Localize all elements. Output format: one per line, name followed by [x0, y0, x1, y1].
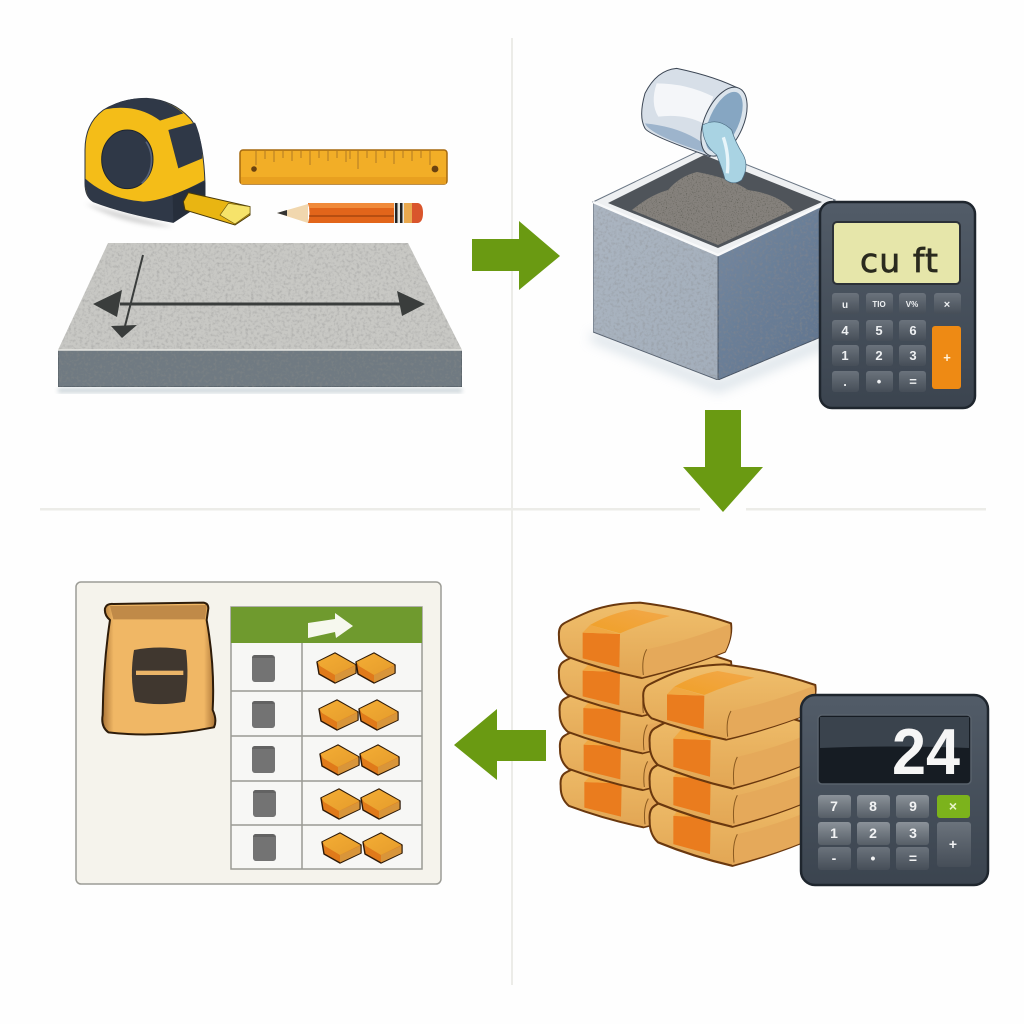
calculator keys: 1 — [841, 348, 849, 363]
icon: concrete box with bucket — [590, 148, 835, 392]
icon: stacked cement bags — [559, 603, 822, 866]
icon: calculator 24 — [801, 695, 988, 885]
calculator keys: - — [832, 850, 837, 866]
calculator keys: × — [949, 798, 957, 814]
icon: cement bag — [102, 603, 215, 734]
calculator keys: 4 — [841, 323, 849, 338]
calculator keys: • — [877, 374, 882, 389]
calculator keys: 1 — [830, 825, 838, 841]
panel: step 2 volume — [590, 68, 975, 408]
table row 2 — [252, 700, 398, 730]
calculator keys: 2 — [869, 825, 877, 841]
calculator keys: = — [909, 850, 917, 866]
icon: bucket pouring water — [642, 68, 757, 183]
icon: tape measure — [85, 98, 250, 227]
icon: ruler — [240, 150, 447, 184]
calculator keys: 7 — [830, 798, 838, 814]
concrete slab — [58, 243, 462, 393]
calculator keys: 2 — [875, 348, 883, 363]
table row 1 — [252, 653, 395, 683]
calculator keys: 3 — [909, 825, 917, 841]
icon: calculator cu ft — [820, 202, 975, 408]
panel: step 3 bags and total — [559, 603, 988, 885]
calculator keys: V% — [906, 300, 918, 309]
calculator keys: TIO — [872, 300, 886, 309]
calculator keys: + — [943, 350, 951, 365]
calculator keys: 3 — [909, 348, 917, 363]
calculator display number: 24 — [892, 715, 960, 788]
table row 4 — [253, 789, 400, 819]
arrow: step 2 to step 3 — [683, 410, 763, 512]
table row 5 — [253, 833, 402, 863]
panel: step 1 measure slab — [58, 98, 462, 393]
calculator keys — [832, 293, 961, 392]
calculator keys: 5 — [875, 323, 883, 338]
arrow: step 3 to step 4 — [454, 709, 546, 780]
calculator keys: × — [944, 299, 950, 311]
dimension arrows on slab — [93, 255, 425, 338]
arrow: step 1 to step 2 — [472, 221, 560, 290]
calculator keys: • — [871, 850, 876, 866]
table row 3 — [252, 745, 399, 775]
calculator keys — [818, 795, 971, 870]
panel: step 4 bag conversion chart — [76, 582, 441, 884]
calculator keys: u — [842, 300, 848, 311]
calculator keys: = — [909, 374, 917, 389]
icon: pencil — [277, 203, 423, 223]
calculator keys: 8 — [869, 798, 877, 814]
icon: header arrow — [308, 613, 353, 638]
calculator keys: 6 — [909, 323, 917, 338]
calculator keys: . — [843, 374, 847, 389]
calculator display text: cu ft — [860, 241, 938, 280]
calculator keys: 9 — [909, 798, 917, 814]
calculator keys: + — [949, 836, 957, 852]
table: bags to bricks — [231, 607, 422, 869]
